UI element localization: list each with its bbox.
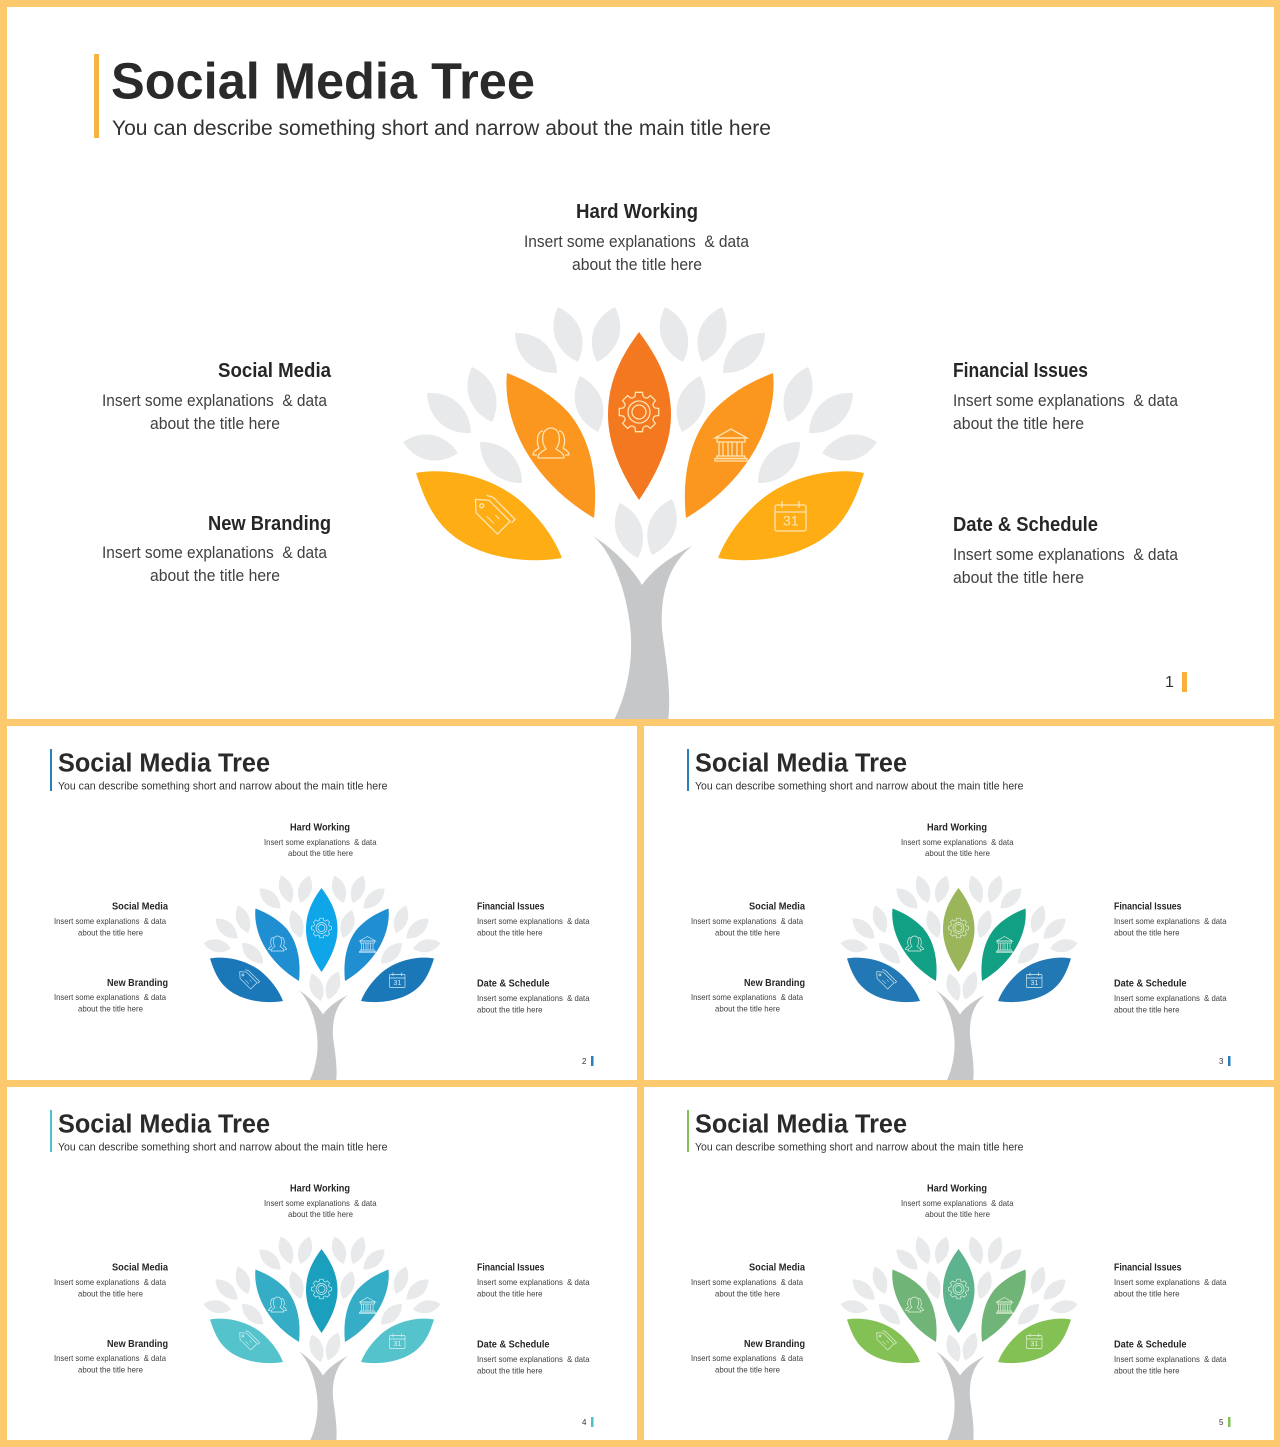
page accent bar (1228, 1056, 1230, 1066)
text block: Financial Issues: about the title here (1114, 928, 1180, 938)
subtitle: You can describe something short and narrow about the main title here (695, 1142, 1024, 1154)
text block: Hard Working: Insert some explanations & data (524, 232, 749, 251)
text block: New Branding (691, 1339, 805, 1374)
text block: New Branding: New Branding (744, 978, 805, 989)
text block: Date & Schedule: Insert some explanations & data (477, 993, 590, 1003)
text block: Financial Issues: Insert some explanations & data (1114, 1277, 1227, 1287)
panel: slide 3 (green and blue) (687, 749, 1230, 1083)
panel: slide 4 (teal) (50, 1110, 594, 1444)
title: Social Media Tree (695, 1110, 907, 1138)
text block: Social Media (691, 902, 805, 938)
text block: Hard Working: Insert some explanations & data (264, 837, 377, 847)
text block: New Branding: Insert some explanations & data (691, 1353, 803, 1363)
icon label: calendar date: 31 (1030, 980, 1038, 987)
icon: price tags (469, 490, 515, 536)
page number: 4 (582, 1418, 587, 1427)
text block: Social Media: Insert some explanations & data (54, 916, 166, 926)
text block: New Branding: about the title here (150, 566, 280, 585)
tree illustration (401, 302, 879, 722)
text block: Date & Schedule: Insert some explanations & data (1114, 993, 1227, 1003)
text block: Social Media: Social Media (112, 1262, 168, 1274)
text block: Social Media (102, 360, 332, 433)
tree illustration (202, 1234, 442, 1444)
icon label: calendar date: 31 (394, 980, 401, 987)
text block: New Branding (691, 978, 805, 1014)
tree illustration (839, 1234, 1079, 1444)
text block: Hard Working: Hard Working (927, 1184, 987, 1194)
text block: Social Media: about the title here (78, 928, 143, 938)
text block: Date & Schedule: about the title here (477, 1366, 543, 1376)
text block: Social Media: Social Media (749, 902, 805, 912)
trunk (593, 536, 692, 722)
text block: Date & Schedule: about the title here (953, 568, 1084, 587)
text block: Hard Working: about the title here (288, 848, 353, 858)
text block: Hard Working (901, 1184, 1014, 1219)
text block: New Branding: Insert some explanations & data (691, 992, 803, 1002)
text block: New Branding: New Branding (744, 1339, 805, 1350)
text block: Social Media: Insert some explanations & data (54, 1277, 166, 1287)
text block: Hard Working: Hard Working (576, 201, 698, 223)
title: Social Media Tree (58, 749, 270, 777)
panel: slide 5 (green) (687, 1110, 1230, 1444)
title: Social Media Tree (111, 52, 535, 110)
text block: New Branding: about the title here (78, 1004, 143, 1014)
page number: 1 (1165, 674, 1174, 691)
page accent bar (591, 1417, 594, 1427)
title accent bar (94, 54, 99, 138)
title accent bar (50, 1110, 52, 1152)
text block: Date & Schedule: about the title here (477, 1004, 543, 1014)
text block: New Branding (102, 513, 331, 585)
text block: Financial Issues: Financial Issues (953, 360, 1088, 382)
page accent bar (591, 1056, 594, 1066)
text block: Hard Working: Hard Working (290, 822, 350, 834)
text block: Social Media: Insert some explanations & data (691, 916, 803, 926)
subtitle: You can describe something short and narrow about the main title here (58, 1142, 388, 1154)
text block: Financial Issues: Insert some explanations & data (477, 916, 590, 926)
text block: Date & Schedule (953, 514, 1178, 587)
text block: Hard Working: Hard Working (290, 1184, 350, 1194)
text block: Social Media: about the title here (715, 1288, 780, 1298)
text block: Financial Issues (1114, 902, 1227, 938)
background grey leaves (401, 302, 879, 562)
text block: Social Media: Social Media (112, 902, 168, 912)
text block: Date & Schedule: Date & Schedule (1114, 978, 1187, 990)
text block: Hard Working: Insert some explanations & data (264, 1198, 377, 1208)
text block: Financial Issues: about the title here (477, 1288, 543, 1298)
panel: main slide (orange) (94, 52, 1187, 722)
text block: Financial Issues (477, 902, 590, 938)
text block: Date & Schedule (477, 978, 590, 1014)
text block: Social Media: about the title here (715, 928, 780, 938)
tree illustration (202, 873, 442, 1083)
text block: Social Media: Insert some explanations & data (102, 391, 327, 410)
text block: Social Media: Social Media (749, 1262, 805, 1274)
page number: 2 (582, 1057, 587, 1066)
text block: Date & Schedule: about the title here (1114, 1004, 1180, 1014)
text block: Social Media (54, 1262, 168, 1298)
text block: Date & Schedule: about the title here (1114, 1366, 1180, 1376)
text block: Hard Working (264, 1184, 377, 1219)
icon label: calendar date: 31 (783, 512, 799, 528)
text block: Financial Issues: Financial Issues (477, 1262, 545, 1274)
text block: New Branding: New Branding (107, 978, 168, 989)
text block: Social Media (54, 902, 168, 938)
text block: Hard Working: Insert some explanations & data (901, 837, 1014, 847)
tree illustration (839, 873, 1079, 1083)
text block: Financial Issues (953, 360, 1178, 433)
icon: calendar frame (775, 501, 806, 531)
text block: Financial Issues (477, 1262, 590, 1298)
icon: bank (715, 429, 747, 461)
text block: New Branding: about the title here (78, 1364, 143, 1374)
text block: Date & Schedule (1114, 1340, 1227, 1376)
text block: Financial Issues: about the title here (953, 414, 1084, 433)
text block: Date & Schedule: Date & Schedule (477, 1340, 550, 1350)
icon label: calendar date: 31 (1030, 1341, 1038, 1348)
leaf: low left (416, 471, 562, 560)
text block: Financial Issues: Financial Issues (477, 902, 545, 912)
text block: Hard Working: about the title here (925, 848, 990, 858)
page number: 3 (1219, 1057, 1224, 1066)
text block: Date & Schedule (1114, 978, 1227, 1014)
text block: Social Media: Insert some explanations & data (691, 1277, 803, 1287)
text block: Financial Issues: Insert some explanations & data (1114, 916, 1227, 926)
text block: New Branding: New Branding (208, 513, 331, 535)
text block: Hard Working (901, 822, 1014, 858)
page accent bar (1182, 672, 1187, 692)
text block: Financial Issues: Insert some explanations & data (953, 391, 1178, 410)
text block: New Branding: Insert some explanations & data (102, 543, 327, 562)
text block: Date & Schedule: Insert some explanations & data (477, 1354, 590, 1364)
subtitle: You can describe something short and narrow about the main title here (695, 780, 1024, 792)
text block: New Branding: New Branding (107, 1339, 168, 1350)
title accent bar (50, 749, 52, 791)
text block: Date & Schedule: Date & Schedule (477, 978, 550, 990)
leaf: top centre (608, 332, 671, 500)
leaf: middle left (506, 373, 595, 518)
text block: Date & Schedule: Insert some explanations & data (953, 545, 1178, 564)
text block: Hard Working: about the title here (572, 255, 702, 274)
icon: gear (619, 392, 659, 432)
text block: Financial Issues: Financial Issues (1114, 902, 1182, 912)
text block: Hard Working (264, 822, 377, 858)
icon: people (533, 428, 569, 458)
page accent bar (1228, 1417, 1230, 1427)
text block: Social Media: about the title here (78, 1288, 143, 1298)
text block: Date & Schedule (477, 1340, 590, 1376)
text block: Date & Schedule: Date & Schedule (953, 514, 1098, 536)
text block: Date & Schedule: Date & Schedule (1114, 1340, 1187, 1350)
subtitle: You can describe something short and narrow about the main title here (112, 116, 771, 140)
text block: Financial Issues: Insert some explanations & data (477, 1277, 590, 1287)
text block: New Branding: about the title here (715, 1364, 780, 1374)
text block: Hard Working: about the title here (288, 1209, 353, 1219)
text block: Hard Working: Insert some explanations & data (901, 1198, 1014, 1208)
title accent bar (687, 1110, 689, 1152)
title: Social Media Tree (58, 1110, 270, 1138)
text block: Social Media: about the title here (150, 414, 280, 433)
icon label: calendar date: 31 (394, 1341, 401, 1348)
text block: Hard Working: Hard Working (927, 822, 987, 834)
text block: New Branding (54, 978, 168, 1014)
text block: Financial Issues: about the title here (477, 928, 543, 938)
leaf: middle right (685, 373, 774, 518)
page number: 5 (1219, 1418, 1224, 1427)
text block: New Branding: Insert some explanations & data (54, 992, 166, 1002)
text block: Financial Issues: Financial Issues (1114, 1262, 1182, 1274)
text block: Hard Working (524, 201, 749, 274)
subtitle: You can describe something short and narrow about the main title here (58, 780, 388, 792)
text block: New Branding: Insert some explanations & data (54, 1353, 166, 1363)
panel: slide 2 (blue) (50, 749, 594, 1083)
text block: Date & Schedule: Insert some explanations & data (1114, 1354, 1227, 1364)
text block: New Branding (54, 1339, 168, 1374)
text block: Financial Issues (1114, 1262, 1227, 1298)
title accent bar (687, 749, 689, 791)
text block: Financial Issues: about the title here (1114, 1288, 1180, 1298)
title: Social Media Tree (695, 749, 907, 777)
text block: Hard Working: about the title here (925, 1209, 990, 1219)
text block: Social Media: Social Media (218, 360, 332, 382)
leaf: low right (718, 471, 864, 560)
text block: Social Media (691, 1262, 805, 1298)
text block: New Branding: about the title here (715, 1004, 780, 1014)
